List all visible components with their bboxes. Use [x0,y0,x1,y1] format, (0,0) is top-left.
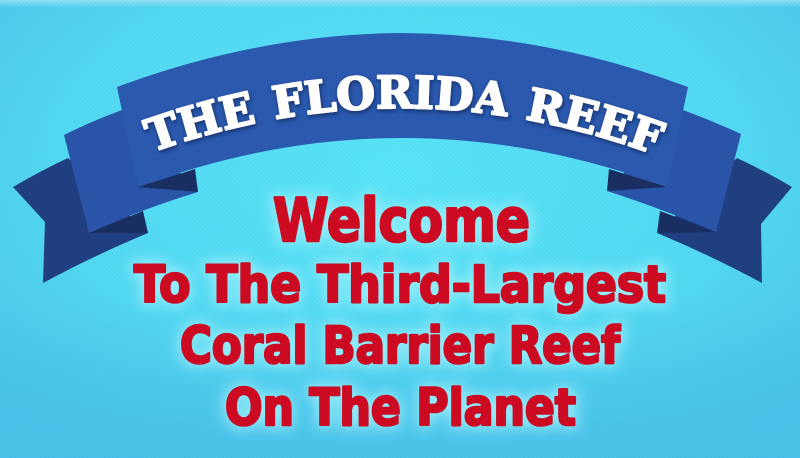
left middle ribbon [64,110,198,233]
right upper fold shadow [607,169,667,191]
line 4: On The Planet [225,379,576,438]
left outer ribbon tail [13,158,148,283]
left lower fold shadow [89,211,148,233]
headline glow: Coral Barrier Reef [179,317,622,376]
headline text [134,186,666,438]
line 3: Coral Barrier Reef [180,317,621,376]
headline glow [133,186,667,438]
headline glow: Welcome [272,186,531,256]
right lower fold shadow [657,211,716,233]
line 2: To The Third-Largest [134,256,666,315]
left upper fold shadow [138,169,198,192]
main ribbon band [117,33,688,187]
right outer ribbon tail [657,158,792,283]
line 1: Welcome [273,186,530,256]
ribbon title: THE FLORIDA REEF [140,74,670,156]
ribbon banner [13,33,792,283]
right middle ribbon [607,110,741,232]
headline glow: To The Third-Largest [133,256,667,315]
headline glow: On The Planet [224,379,577,438]
